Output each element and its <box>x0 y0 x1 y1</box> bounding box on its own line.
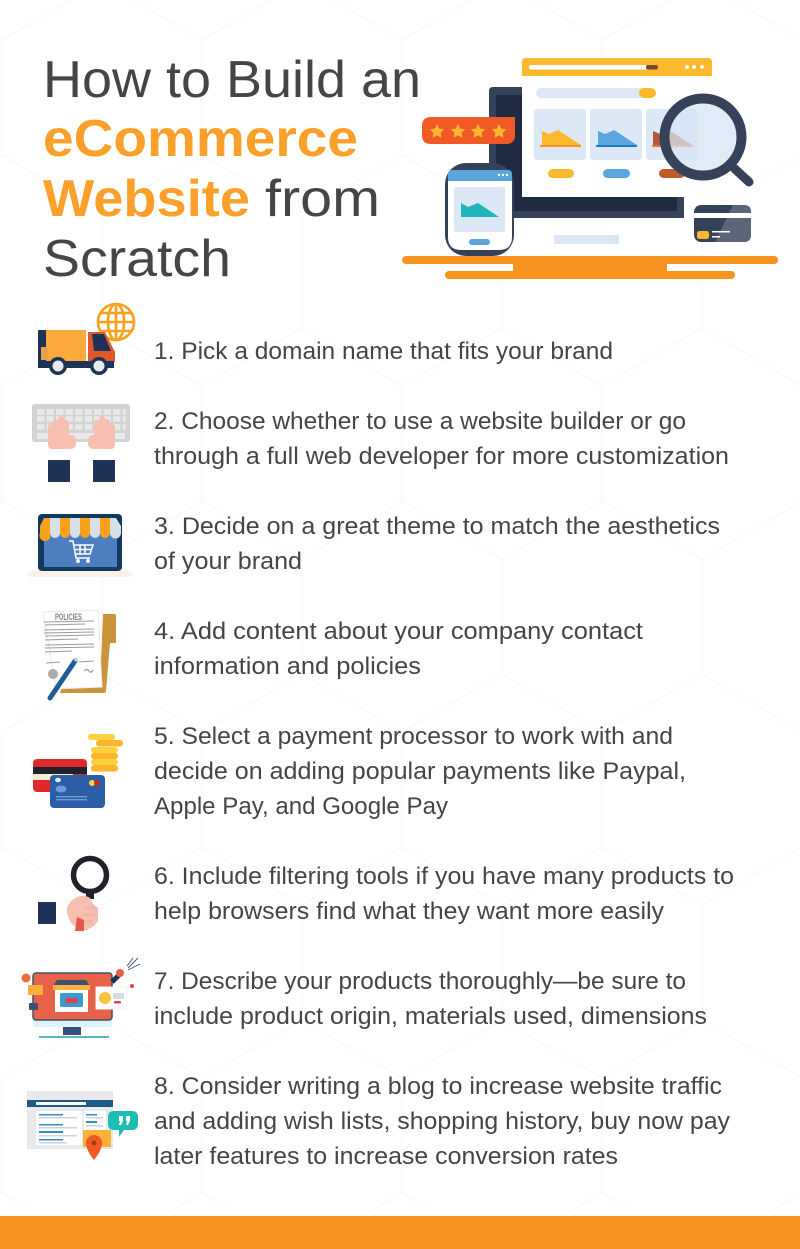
icon: online shop on desktop monitor <box>22 958 140 1038</box>
step 3 text <box>154 513 720 575</box>
step 5 text: 5. Select a payment processor to work with and <box>154 723 673 750</box>
step 2 text: through a full web developer for more customization <box>154 443 729 470</box>
step 3 text: 3. Decide on a great theme to match the aesthetics <box>154 513 720 540</box>
step 6 text: 6. Include filtering tools if you have many products to <box>154 863 734 890</box>
step 6 text: help browsers find what they want more easily <box>154 898 664 925</box>
title: Scratch <box>43 230 231 288</box>
icon: hand holding magnifier <box>38 858 106 931</box>
title: Website <box>43 170 250 228</box>
step 4 text: 4. Add content about your company contact <box>154 618 643 645</box>
title: How to Build an <box>43 51 421 109</box>
step 2 text <box>154 408 729 470</box>
step 4 text: information and policies <box>154 653 421 680</box>
icon: credit cards and coins <box>33 734 123 808</box>
step 4 text <box>154 618 643 680</box>
footer bar <box>0 1216 800 1249</box>
step 5 text: decide on adding popular payments like Paypal, <box>154 758 686 785</box>
step 3 text: of your brand <box>154 548 302 575</box>
step 8 text: 8. Consider writing a blog to increase website traffic <box>154 1073 722 1100</box>
step 8 text <box>154 1073 730 1170</box>
step 5 text <box>154 723 686 820</box>
icon: policies document and pen <box>43 610 116 698</box>
step 1 text: 1. Pick a domain name that fits your brand <box>154 338 613 365</box>
step 6 text <box>154 863 734 925</box>
illustration: ecommerce storefront on devices <box>402 58 778 279</box>
icon: policies document and pen: POLICIES <box>55 612 82 622</box>
title: eCommerce <box>43 110 358 168</box>
icon: laptop storefront with cart <box>28 514 132 577</box>
step 8 text: later features to increase conversion rates <box>154 1143 618 1170</box>
step 7 text <box>154 968 707 1030</box>
step 8 text: and adding wish lists, shopping history, buy now pay <box>154 1108 730 1135</box>
title: from <box>265 170 380 228</box>
icon: hands on keyboard <box>32 404 130 482</box>
icon: truck with globe <box>38 304 134 375</box>
title <box>43 51 421 288</box>
step 5 text: Apple Pay, and Google Pay <box>154 793 448 820</box>
step 2 text: 2. Choose whether to use a website builder or go <box>154 408 686 435</box>
icon: blog page with speech bubble and map pin <box>27 1091 138 1160</box>
step 7 text: include product origin, materials used, dimensions <box>154 1003 707 1030</box>
step 7 text: 7. Describe your products thoroughly—be sure to <box>154 968 686 995</box>
